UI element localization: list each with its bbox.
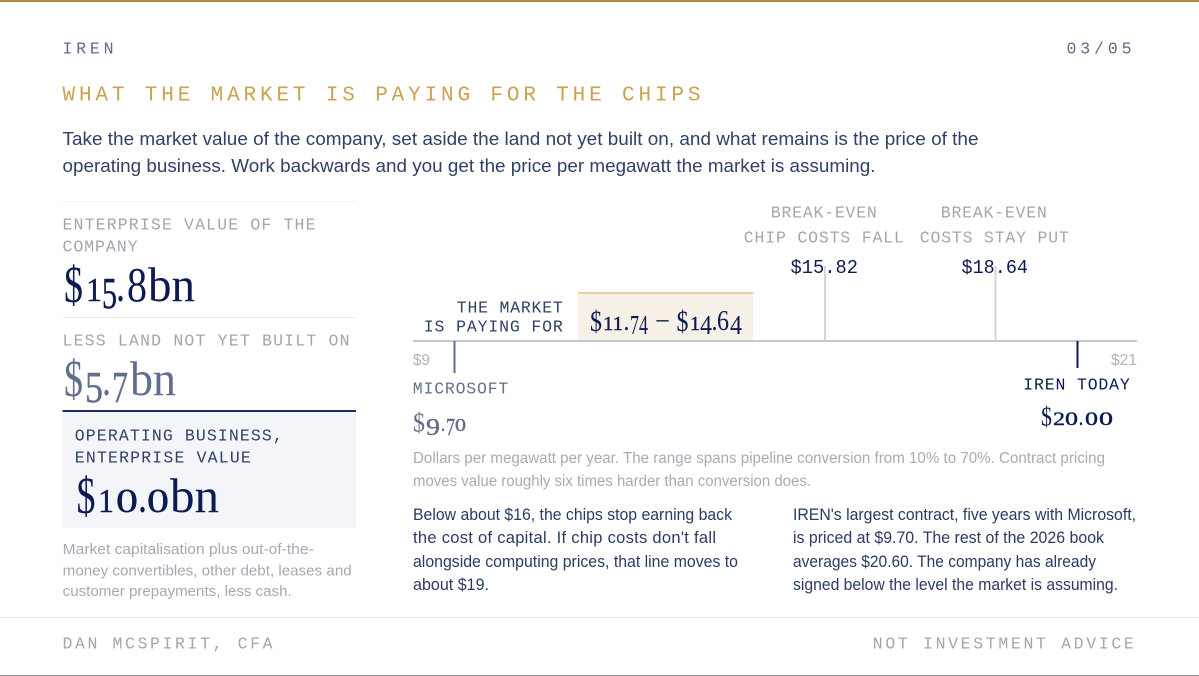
operating business highlight box: 0 — [147, 483, 169, 520]
operating business highlight box: 1 — [98, 483, 114, 520]
enterprise value of the company: bn — [148, 257, 195, 312]
market range band: 11 — [603, 313, 623, 335]
market range band: 1 — [690, 313, 700, 335]
marker: Microsoft: $ — [413, 408, 425, 438]
market range band: 4 — [730, 310, 742, 340]
market range band: 74 — [630, 310, 648, 340]
chart note: moves value roughly six times harder than conversion does. — [413, 473, 811, 490]
range label: THE MARKET — [457, 298, 563, 318]
range label — [424, 298, 563, 336]
operating business highlight box — [62, 412, 356, 528]
intro text: operating business. Work backwards and you get the price per megawatt the market is assuming. — [62, 155, 876, 176]
text block: Microsoft contract commentary: signed below the level the market is assuming. — [793, 576, 1118, 594]
text block: Microsoft contract commentary — [793, 506, 1136, 594]
operating business highlight box: OPERATING BUSINESS, — [75, 426, 283, 446]
text block: break-even commentary: alongside computing prices, that line moves to — [413, 553, 738, 571]
marker: Microsoft: 7 — [446, 415, 455, 441]
text block: break-even commentary: Below about $16, the chips stop earning back — [413, 506, 733, 524]
range label: IS PAYING FOR — [424, 318, 563, 336]
less land not yet built on: 5 — [85, 363, 103, 412]
market range band: 4 — [700, 310, 712, 340]
panel: enterprise value bridge — [62, 201, 356, 600]
marker: IREN today: 0 — [1099, 409, 1113, 430]
header: page number: 03/05 — [1066, 40, 1132, 58]
marker: IREN today: . — [1078, 404, 1084, 431]
axis minimum: $9 — [413, 352, 430, 369]
less land not yet built on: 7 — [112, 363, 128, 412]
marker: break-even chip costs fall: BREAK-EVEN — [771, 204, 877, 222]
marker: break-even costs stay put: COSTS STAY PUT — [920, 228, 1069, 248]
market range band: . — [624, 306, 630, 337]
enterprise value of the company: . — [116, 257, 125, 312]
intro text — [62, 128, 978, 176]
less land not yet built on: . — [102, 351, 111, 406]
chart: price per megawatt scale — [413, 204, 1137, 441]
enterprise value of the company: 1 — [86, 272, 102, 309]
operating business highlight box: $ — [76, 468, 96, 525]
header: company name: IREN — [62, 40, 114, 58]
marker: IREN today: 0 — [1065, 409, 1078, 430]
chart note — [413, 450, 1105, 490]
axis maximum: $21 — [1111, 352, 1137, 369]
marker: break-even costs stay put: $18.64 — [962, 257, 1028, 279]
footer: disclaimer: NOT INVESTMENT ADVICE — [873, 634, 1134, 654]
title: WHAT THE MARKET IS PAYING FOR THE CHIPS — [62, 84, 700, 108]
text block: break-even commentary — [413, 506, 738, 594]
footnote — [63, 541, 352, 600]
market range band: . — [712, 306, 718, 337]
text block: Microsoft contract commentary: is priced at $9.70. The rest of the 2026 book — [793, 529, 1105, 547]
text block: Microsoft contract commentary: IREN's largest contract, five years with Microsoft, — [793, 506, 1136, 524]
footnote: money convertibles, other debt, leases and — [63, 562, 352, 580]
marker: break-even costs stay put — [920, 204, 1069, 341]
marker: IREN today — [1023, 341, 1130, 432]
operating business highlight box: 0 — [116, 483, 138, 520]
marker: Microsoft: MICROSOFT — [413, 380, 508, 398]
marker: IREN today: IREN TODAY — [1023, 376, 1130, 394]
operating business highlight box: ENTERPRISE VALUE — [75, 448, 251, 468]
enterprise value of the company: COMPANY — [62, 238, 138, 256]
footnote: Market capitalisation plus out-of-the- — [63, 541, 314, 558]
marker: IREN today: 2 — [1053, 409, 1065, 430]
chart note: Dollars per megawatt per year. The range spans pipeline conversion from 10% to 70%. Contract pricing — [413, 450, 1105, 467]
less land not yet built on: bn — [130, 351, 176, 406]
marker: IREN today: $ — [1041, 402, 1052, 432]
market range band: 6 — [717, 306, 729, 337]
market range band: $ — [590, 305, 602, 338]
market range band: – — [656, 303, 669, 333]
marker: Microsoft — [413, 341, 508, 441]
marker: Microsoft: . — [440, 410, 446, 437]
operating business highlight box: bn — [170, 468, 219, 523]
marker: Microsoft: 9 — [426, 415, 440, 441]
enterprise value of the company: ENTERPRISE VALUE OF THE — [62, 216, 316, 234]
footnote: customer prepayments, less cash. — [63, 583, 292, 600]
market range band: $ — [676, 305, 688, 338]
enterprise value of the company: $ — [64, 257, 83, 314]
marker: break-even chip costs fall — [744, 204, 904, 341]
marker: Microsoft: 0 — [455, 415, 466, 435]
marker: break-even costs stay put: BREAK-EVEN — [941, 204, 1047, 222]
enterprise value of the company: 5 — [102, 269, 117, 318]
text block: break-even commentary: the cost of capital. If chip costs don't fall — [413, 529, 716, 547]
enterprise value of the company — [62, 216, 316, 318]
less land not yet built on — [62, 332, 350, 412]
operating business highlight box: . — [138, 468, 147, 523]
marker: break-even chip costs fall: $15.82 — [790, 257, 858, 279]
marker: IREN today: 0 — [1085, 409, 1098, 430]
footer: author: DAN MCSPIRIT, CFA — [62, 634, 273, 654]
enterprise value of the company: 8 — [127, 257, 147, 312]
text block: Microsoft contract commentary: averages $20.60. The company has already — [793, 553, 1097, 571]
market range band — [578, 292, 753, 341]
less land not yet built on: LESS LAND NOT YET BUILT ON — [62, 332, 350, 350]
marker: break-even chip costs fall: CHIP COSTS FALL — [744, 228, 904, 248]
text block: break-even commentary: about $19. — [413, 576, 489, 594]
intro text: Take the market value of the company, set aside the land not yet built on, and what remains is the price of the — [62, 128, 978, 149]
less land not yet built on: $ — [64, 351, 83, 408]
